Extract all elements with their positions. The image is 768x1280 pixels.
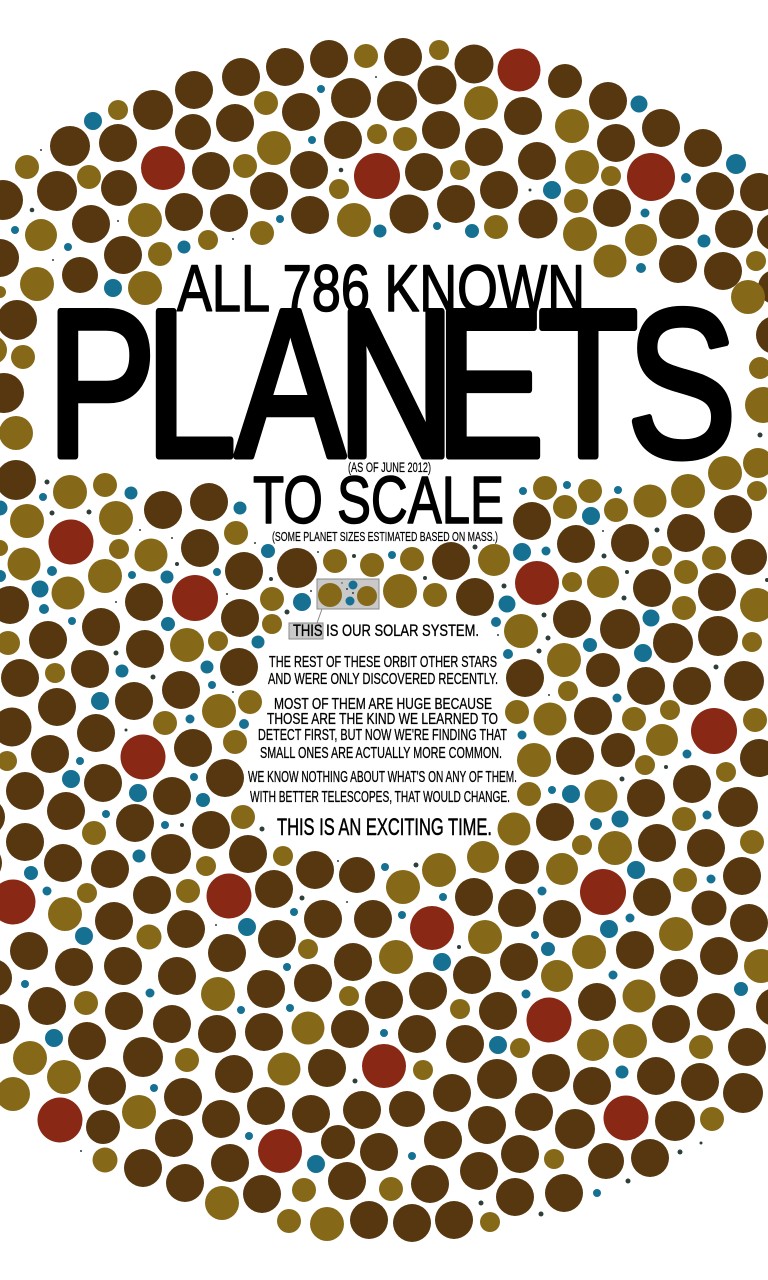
paragraph: other stars: AND WERE ONLY DISCOVERED RECENTLY.: [268, 671, 498, 688]
paragraph: telescopes: [248, 769, 517, 806]
size estimate note: (SOME PLANET SIZES ESTIMATED BASED ON MASS.): [272, 529, 498, 544]
title: planets: PLANETS: [47, 266, 736, 501]
paragraph: huge planets: THOSE ARE THE KIND WE LEARNED TO: [267, 711, 498, 728]
closing line: THIS IS AN EXCITING TIME.: [277, 814, 492, 841]
paragraph: telescopes: WE KNOW NOTHING ABOUT WHAT'S ON ANY OF THEM.: [248, 769, 517, 786]
solar system highlight inset: [317, 579, 379, 623]
paragraph: huge planets: DETECT FIRST, BUT NOW WE'RE FINDING THAT: [258, 727, 507, 744]
paragraph: other stars: [268, 654, 498, 688]
paragraph: huge planets: [258, 696, 507, 762]
title line: all 786 known: ALL 786 KNOWN: [177, 251, 585, 325]
paragraph: telescopes: WITH BETTER TELESCOPES, THAT WOULD CHANGE.: [250, 789, 510, 806]
date note: (AS OF JUNE 2012): [348, 460, 431, 475]
solar system line: THIS IS OUR SOLAR SYSTEM.: [293, 621, 479, 640]
paragraph: huge planets: SMALL ONES ARE ACTUALLY MORE COMMON.: [260, 745, 502, 762]
explanatory text block: [248, 621, 517, 841]
paragraph: other stars: THE REST OF THESE ORBIT OTHER STARS: [269, 654, 497, 671]
this highlight box: [289, 623, 323, 639]
paragraph: huge planets: MOST OF THEM ARE HUGE BECAUSE: [274, 696, 492, 713]
subtitle: to scale: TO SCALE: [253, 463, 504, 538]
